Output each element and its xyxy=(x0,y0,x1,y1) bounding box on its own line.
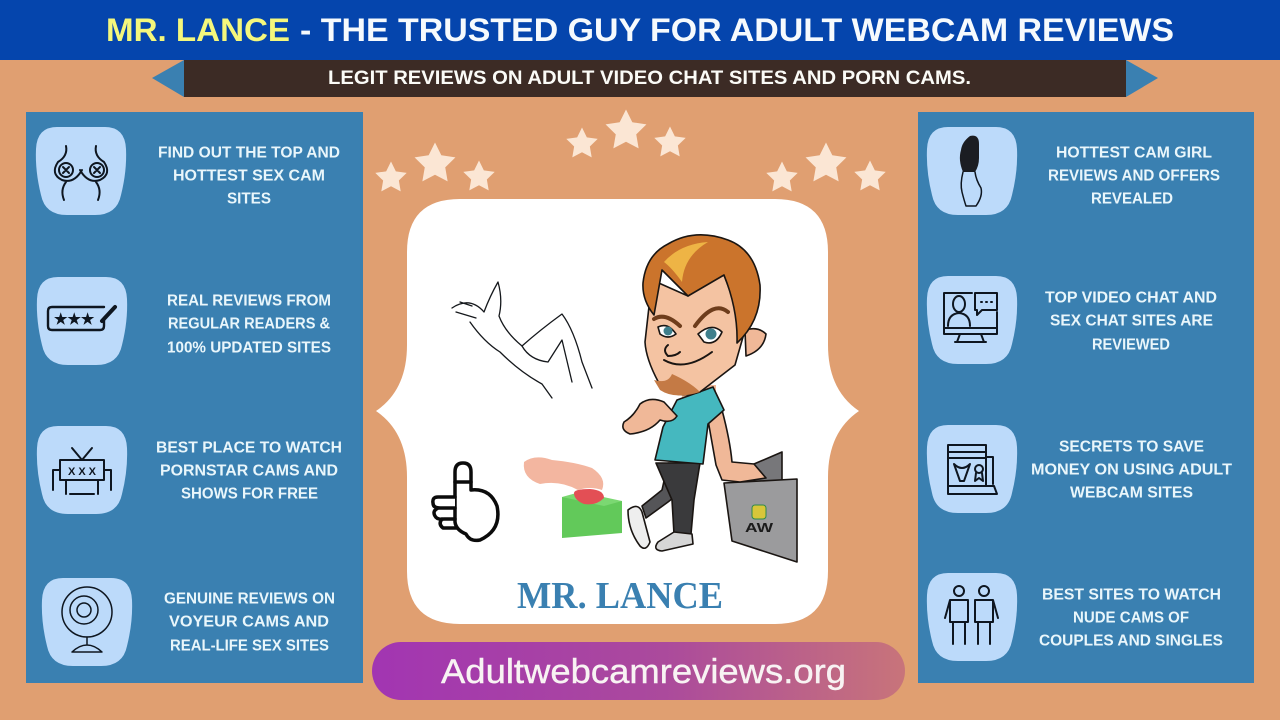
feature: save money: WEBCAM SITES xyxy=(1070,484,1193,502)
feature: pornstar cams xyxy=(37,426,342,514)
feature: voyeur cams: VOYEUR CAMS AND xyxy=(169,614,329,630)
panel: right features xyxy=(918,112,1254,683)
feature: cam girl reviews: HOTTEST CAM GIRL xyxy=(1056,144,1212,162)
feature: cam girl reviews: REVIEWS AND OFFERS xyxy=(1048,168,1220,184)
panel: left features xyxy=(26,112,363,683)
feature: real reviews: ★★★ xyxy=(54,311,95,328)
icon: black outline hand xyxy=(433,463,498,540)
ear xyxy=(745,329,766,356)
feature: top sites: FIND OUT THE TOP AND xyxy=(158,144,340,162)
feature: voyeur cams: GENUINE REVIEWS ON xyxy=(164,590,335,608)
right arm xyxy=(708,410,766,482)
feature: pornstar cams: SHOWS FOR FREE xyxy=(181,486,318,502)
feature: couples: NUDE CAMS OF xyxy=(1073,610,1189,626)
illustration: Mr. Lance cartoon mascot xyxy=(623,235,797,562)
left arm and fist xyxy=(623,399,677,434)
front leg xyxy=(656,463,700,534)
shoes xyxy=(628,506,650,548)
feature: pornstar cams: XXX xyxy=(68,466,97,478)
feature: video chat xyxy=(927,276,1217,364)
icon: abstract line sketch xyxy=(452,282,592,398)
feature: voyeur cams xyxy=(42,578,335,666)
feature: top sites: HOTTEST SEX CAM xyxy=(173,168,325,184)
feature: top sites xyxy=(36,127,340,215)
neck xyxy=(682,385,716,402)
feature: real reviews: REGULAR READERS & xyxy=(168,316,330,332)
feature: save money: SECRETS TO SAVE xyxy=(1059,438,1204,456)
feature: pornstar cams: PORNSTAR CAMS AND xyxy=(160,462,338,480)
back leg xyxy=(642,463,700,518)
nose and smile xyxy=(664,345,712,364)
feature: video chat: SEX CHAT SITES ARE xyxy=(1050,312,1213,330)
face xyxy=(645,270,745,395)
feature: voyeur cams: REAL-LIFE SEX SITES xyxy=(170,638,329,654)
title banner: MR. LANCE xyxy=(106,12,290,48)
feature: cam girl reviews xyxy=(927,127,1220,215)
feature: pornstar cams: BEST PLACE TO WATCH xyxy=(156,440,342,456)
website pill xyxy=(372,642,905,700)
title banner: - THE TRUSTED GUY FOR ADULT WEBCAM REVIEWS xyxy=(300,12,1174,48)
feature: real reviews: 100% UPDATED SITES xyxy=(167,340,331,356)
decorative stars xyxy=(375,110,886,191)
feature: real reviews xyxy=(37,277,331,365)
feature: save money xyxy=(927,425,1233,513)
subtitle ribbon xyxy=(152,60,1158,97)
feature: top sites: SITES xyxy=(227,190,271,208)
feature: cam girl reviews: REVEALED xyxy=(1091,190,1173,208)
feature: save money: MONEY ON USING ADULT xyxy=(1031,462,1233,478)
name label: MR. LANCE xyxy=(517,575,723,617)
website pill: Adultwebcamreviews.org xyxy=(441,653,846,691)
beard xyxy=(654,374,700,396)
feature: video chat: REVIEWED xyxy=(1092,336,1170,354)
title banner xyxy=(0,0,1280,60)
icon: finger pressing a red button on green box xyxy=(524,457,622,538)
hair xyxy=(643,235,760,343)
feature: real reviews: REAL REVIEWS FROM xyxy=(167,292,331,310)
feature: couples xyxy=(927,573,1223,661)
eyes and brows xyxy=(658,326,722,343)
shirt xyxy=(655,387,724,464)
panel: central white card xyxy=(376,199,859,624)
feature: couples: BEST SITES TO WATCH xyxy=(1042,586,1221,604)
laptop xyxy=(724,452,797,562)
feature: couples: COUPLES AND SINGLES xyxy=(1039,632,1223,650)
laptop: AW xyxy=(745,520,774,535)
feature: video chat: TOP VIDEO CHAT AND xyxy=(1045,290,1217,306)
subtitle ribbon: LEGIT REVIEWS ON ADULT VIDEO CHAT SITES AND PORN CAMS. xyxy=(328,68,971,89)
